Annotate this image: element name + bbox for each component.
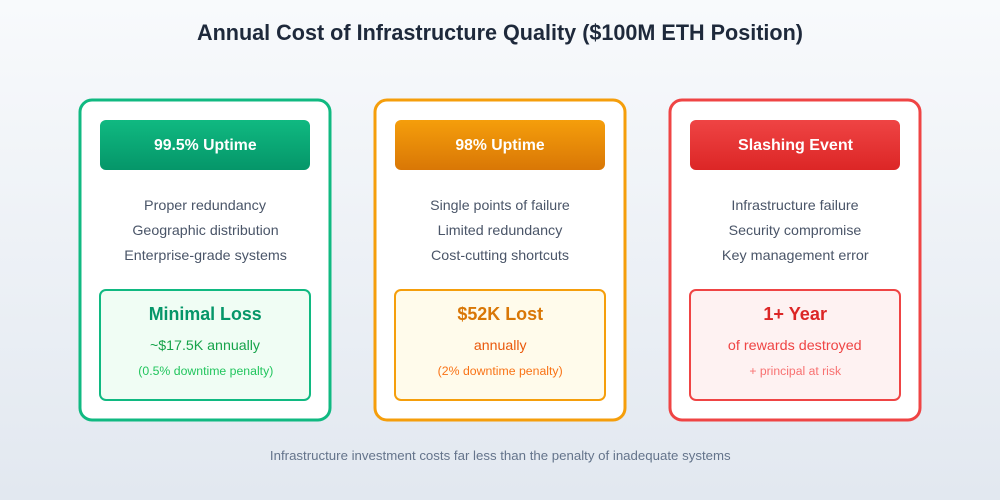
list: uptime factors: Enterprise-grade systems (124, 247, 287, 263)
header: slashing event (690, 120, 900, 170)
result box: minimal loss (100, 290, 310, 400)
list: downtime factors: Single points of failure (430, 197, 570, 213)
header: 98% uptime (395, 120, 605, 170)
list: uptime factors: Geographic distribution (132, 222, 279, 238)
result box: $52K lost: annually (474, 337, 527, 353)
result box: minimal loss: (0.5% downtime penalty) (138, 366, 273, 378)
result box: 1+ year: + principal at risk (749, 366, 841, 378)
header: slashing event: Slashing Event (738, 137, 854, 154)
panel: 98% uptime (375, 100, 625, 420)
header: 99.5% uptime (100, 120, 310, 170)
list: downtime factors: Limited redundancy (438, 222, 562, 238)
title: Annual Cost of Infrastructure Quality ($100M ETH Position) (197, 20, 803, 45)
list: downtime factors (430, 197, 570, 263)
header: 98% uptime: 98% Uptime (455, 137, 545, 154)
result box: $52K lost: $52K Lost (457, 304, 543, 324)
header: 99.5% uptime: 99.5% Uptime (154, 137, 257, 154)
list: slashing causes (722, 197, 869, 263)
result box: $52K lost: (2% downtime penalty) (438, 366, 563, 378)
result box: 1+ year: of rewards destroyed (728, 337, 862, 353)
footer note: Infrastructure investment costs far less than the penalty of inadequate systems (270, 448, 731, 463)
list: slashing causes: Security compromise (729, 222, 862, 238)
result box: 1+ year: 1+ Year (763, 304, 827, 324)
list: slashing causes: Infrastructure failure (731, 197, 859, 213)
panel: slashing event (670, 100, 920, 420)
list: uptime factors (124, 197, 287, 263)
result box: minimal loss: Minimal Loss (149, 304, 262, 324)
result box: $52K lost (395, 290, 605, 400)
result box: 1+ year (690, 290, 900, 400)
panel: 99.5% uptime (80, 100, 330, 420)
list: downtime factors: Cost-cutting shortcuts (431, 247, 569, 263)
list: slashing causes: Key management error (722, 247, 869, 263)
result box: minimal loss: ~$17.5K annually (150, 337, 260, 353)
list: uptime factors: Proper redundancy (144, 197, 266, 213)
